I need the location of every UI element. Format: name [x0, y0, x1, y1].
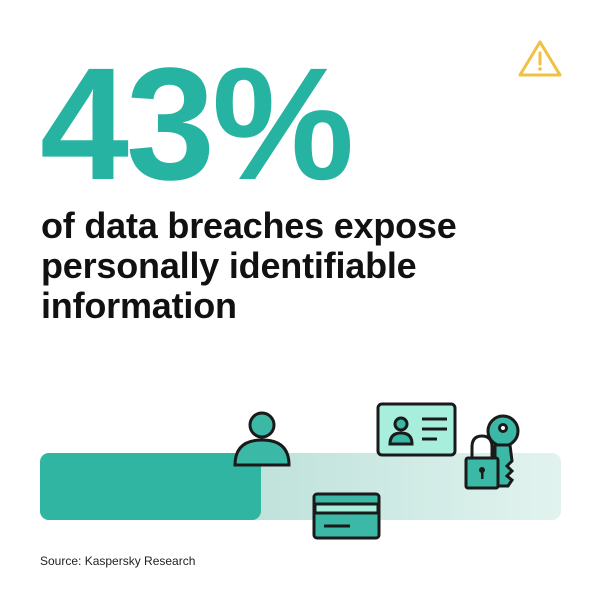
icon: person: [235, 413, 289, 465]
icon: credit card: [314, 494, 379, 538]
subtitle: [41, 205, 457, 326]
big stat: 43%: [40, 34, 351, 213]
icon: lock and key: [466, 416, 518, 488]
subtitle: information: [41, 285, 237, 326]
subtitle: personally identifiable: [41, 245, 416, 286]
subtitle: of data breaches expose: [41, 205, 457, 246]
bar chart with icons: [40, 402, 561, 540]
source: Source: Kaspersky Research: [40, 554, 195, 568]
icon: warning: [518, 40, 562, 76]
icon: id card: [378, 404, 455, 455]
